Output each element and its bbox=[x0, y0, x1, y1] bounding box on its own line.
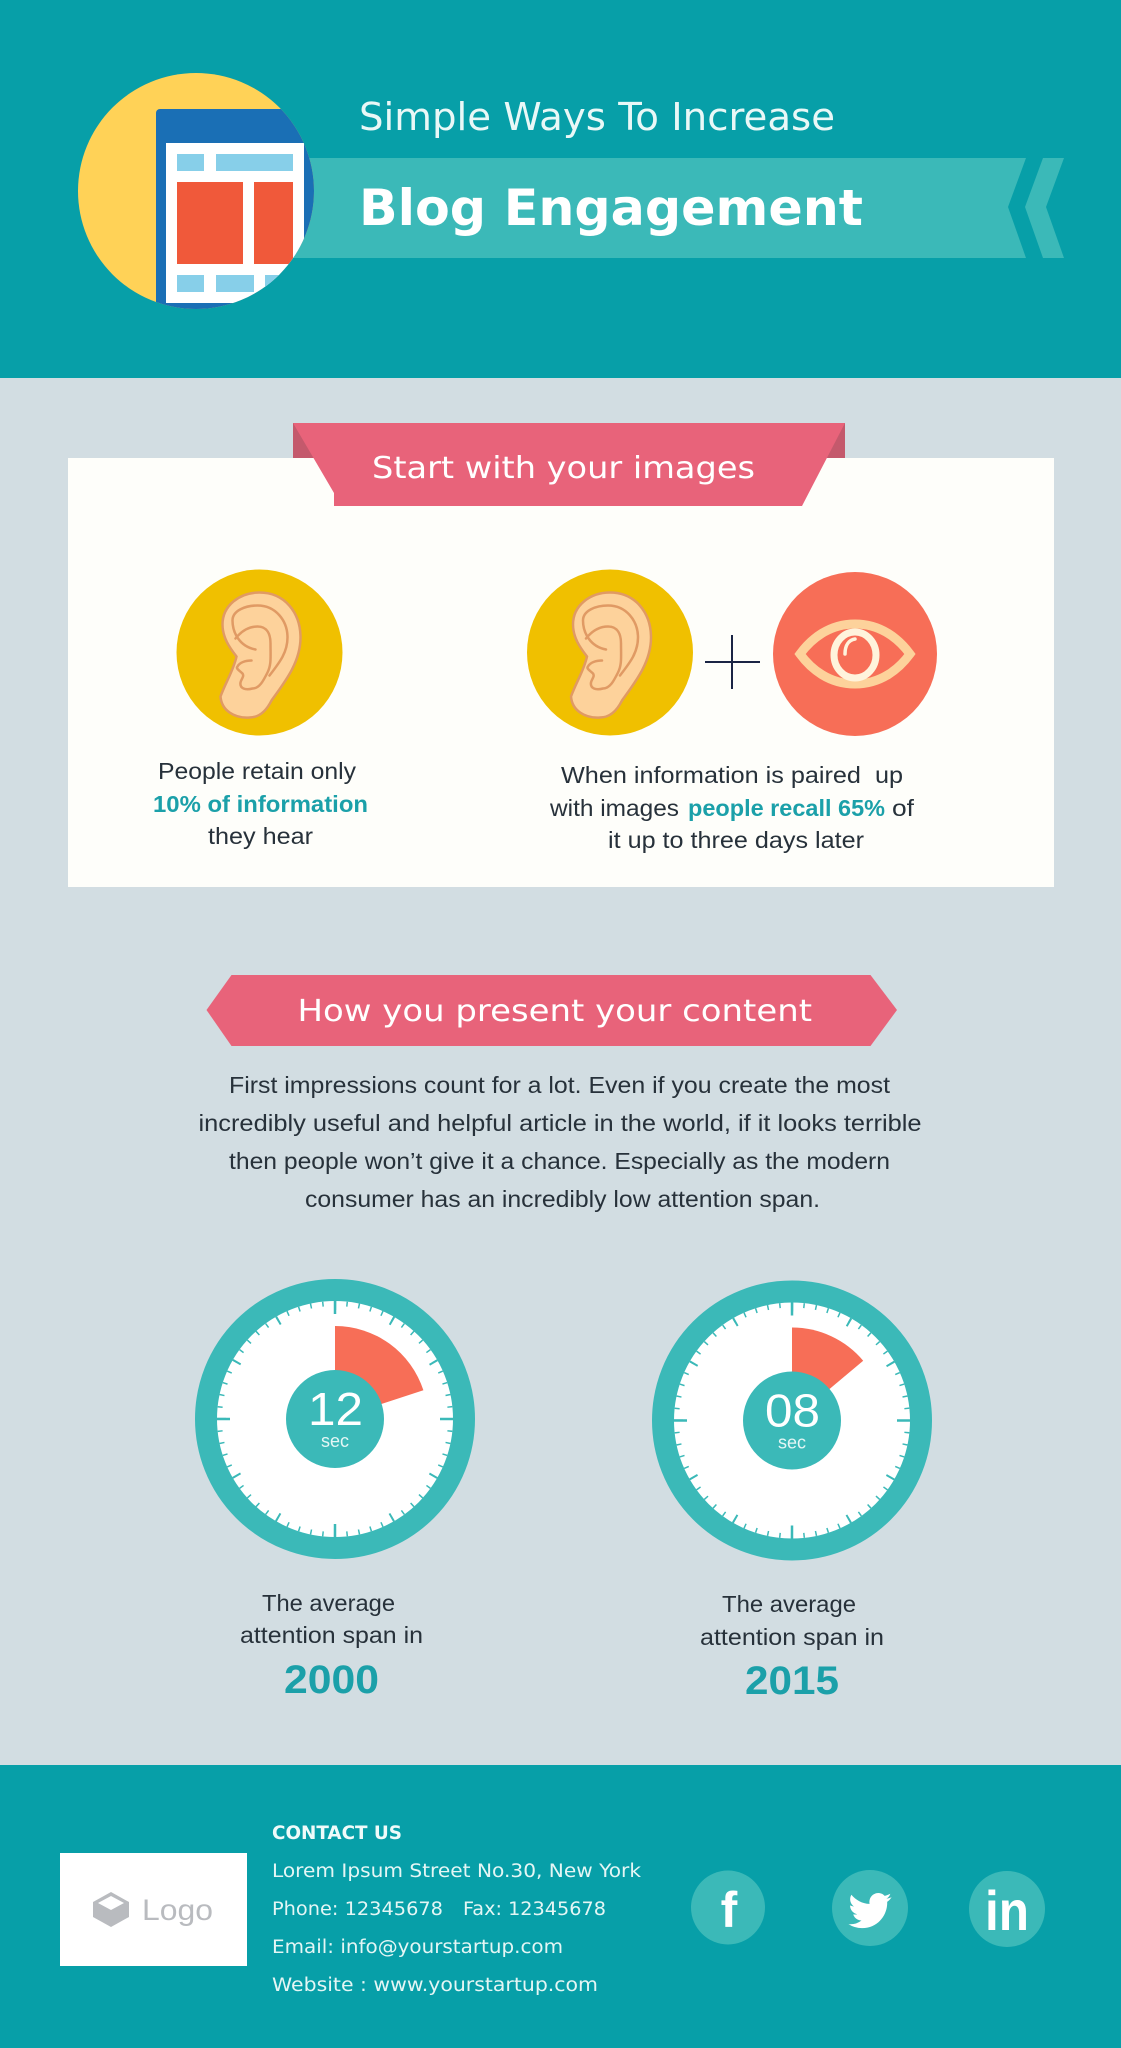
text: ten percent retained bbox=[153, 758, 368, 849]
caption: attention span 2015 bbox=[700, 1591, 884, 1703]
text: ten percent retained: they hear bbox=[208, 823, 313, 849]
title line one: Simple Ways To Increase bbox=[359, 95, 835, 139]
caption: attention span 2000: attention span in bbox=[240, 1622, 423, 1648]
caption: attention span 2015: 2015 bbox=[745, 1659, 839, 1703]
panel: footer bbox=[0, 1765, 1121, 2048]
chart: timer 08 seconds bbox=[663, 1292, 921, 1550]
caption: attention span 2000 bbox=[240, 1590, 423, 1702]
contact details bbox=[272, 1822, 641, 1996]
wedge: elapsed 8 seconds bbox=[792, 1328, 863, 1420]
readout: 08 sec: sec bbox=[778, 1432, 806, 1452]
wedge: elapsed 12 seconds bbox=[335, 1326, 423, 1419]
icon: eye in coral circle bbox=[773, 572, 937, 736]
logo placeholder: Logo bbox=[142, 1894, 213, 1927]
icon: facebook: f bbox=[721, 1882, 738, 1938]
icon: linkedin bbox=[969, 1871, 1045, 1947]
caption: attention span 2000: 2000 bbox=[284, 1658, 379, 1702]
readout: 08 sec bbox=[743, 1372, 841, 1470]
caption: attention span 2015: attention span in bbox=[700, 1624, 884, 1650]
text: ten percent retained: People retain only bbox=[158, 758, 356, 784]
title line two: Blog Engagement bbox=[359, 179, 863, 237]
caption: attention span 2015: The average bbox=[722, 1591, 856, 1617]
icon: facebook bbox=[691, 1870, 765, 1944]
icon: ear in yellow circle bbox=[176, 570, 342, 736]
banner: start with your images: Start with your images bbox=[372, 451, 755, 486]
readout: 12 sec: 12 bbox=[308, 1383, 363, 1435]
text: sixty five percent recalled: with images bbox=[549, 795, 679, 821]
text: sixty five percent recalled: people recall 65% bbox=[688, 795, 885, 821]
contact details: Fax: 12345678 bbox=[463, 1899, 606, 1920]
caption: attention span 2000: The average bbox=[262, 1590, 395, 1616]
icon: ear in yellow circle, second bbox=[527, 570, 693, 736]
text: sixty five percent recalled: When information is paired up bbox=[561, 762, 903, 788]
panel: start with your images bbox=[68, 423, 1054, 887]
text: sixty five percent recalled bbox=[549, 762, 915, 853]
readout: 12 sec: sec bbox=[321, 1431, 349, 1451]
contact details: Phone: 12345678 bbox=[272, 1899, 443, 1920]
icon: plus sign bbox=[705, 635, 760, 689]
logo placeholder bbox=[60, 1853, 247, 1966]
panel: header bbox=[0, 0, 1121, 378]
readout: 12 sec bbox=[286, 1370, 384, 1468]
text block: intro paragraph bbox=[198, 1072, 922, 1212]
contact details: Lorem Ipsum Street No.30, New York bbox=[272, 1861, 641, 1882]
text: ten percent retained: 10% of information bbox=[153, 791, 368, 817]
contact details: Website : www.yourstartup.com bbox=[272, 1975, 598, 1996]
text block: intro paragraph: consumer has an incredibly low attention span. bbox=[305, 1186, 820, 1212]
banner: start with your images bbox=[293, 423, 845, 506]
icon: linkedin: in bbox=[985, 1879, 1029, 1942]
contact details: CONTACT US bbox=[272, 1822, 402, 1844]
contact details: Email: info@yourstartup.com bbox=[272, 1937, 563, 1958]
text: sixty five percent recalled: of bbox=[892, 795, 915, 821]
icon: twitter bbox=[832, 1870, 908, 1946]
text block: intro paragraph: incredibly useful and helpful article in the world, if it looks terrible bbox=[198, 1110, 922, 1136]
banner: how you present your content bbox=[206, 975, 897, 1046]
ribbon: title banner bbox=[290, 158, 1064, 258]
icon: browser window in yellow circle bbox=[78, 73, 316, 319]
text: sixty five percent recalled: it up to three days later bbox=[608, 827, 864, 853]
banner: how you present your content: How you present your content bbox=[298, 994, 812, 1029]
text block: intro paragraph: First impressions count for a lot. Even if you create the most bbox=[229, 1072, 890, 1098]
readout: 08 sec: 08 bbox=[765, 1384, 820, 1436]
chart: timer 12 seconds bbox=[206, 1290, 464, 1548]
text block: intro paragraph: then people won’t give it a chance. Especially as the modern bbox=[229, 1148, 890, 1174]
